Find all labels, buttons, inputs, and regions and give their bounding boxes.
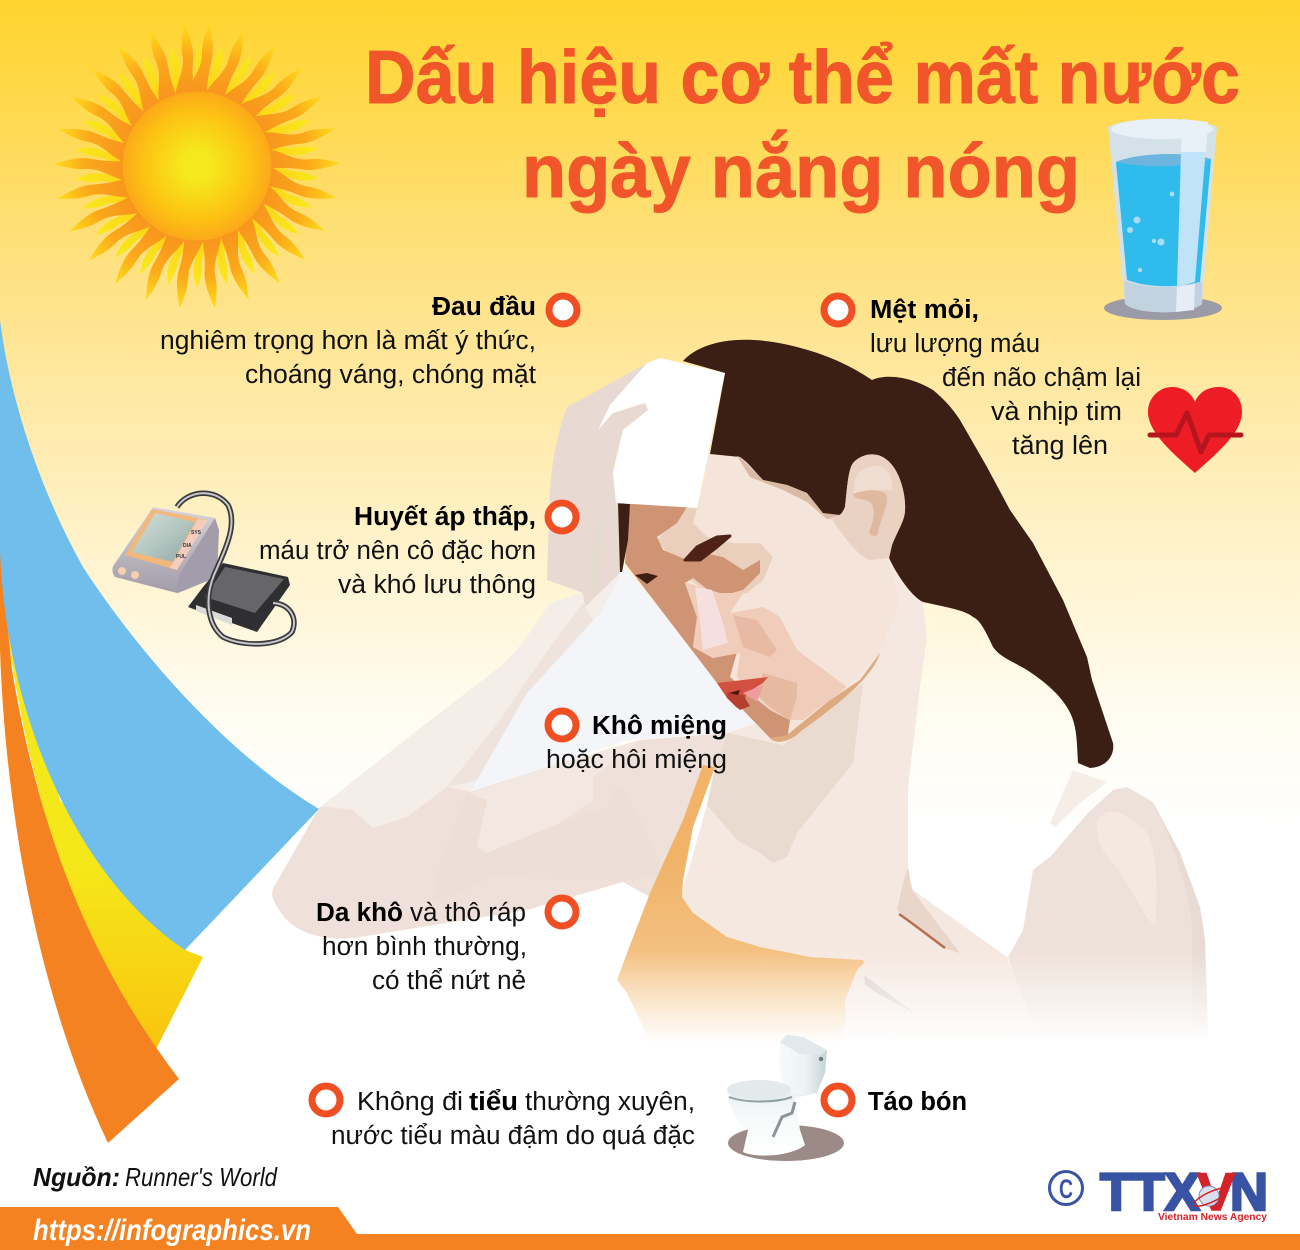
jaw line <box>770 653 880 742</box>
water <box>1116 154 1211 286</box>
title <box>365 35 1240 213</box>
title: ngày nắng nóng <box>522 129 1080 213</box>
text: Đau đầu: nghiêm trọng hơn là mất ý thức, <box>160 327 536 355</box>
armpit crease <box>897 867 960 953</box>
text: Không đi tiểu: tiểu <box>469 1088 518 1116</box>
text: Mệt mỏi <box>870 296 1141 460</box>
sun disc <box>122 92 272 240</box>
glass body <box>1108 119 1217 312</box>
white shirt <box>470 565 757 792</box>
glass base <box>1124 281 1202 312</box>
logo: TTXVN <box>1100 1163 1268 1223</box>
sun rays orange <box>53 22 341 309</box>
lower fade <box>600 950 1240 1044</box>
text: Mệt mỏi: Mệt mỏi, <box>870 296 979 324</box>
marker rings <box>312 296 852 1114</box>
right shoulder <box>1008 787 1208 1037</box>
decorative swooshes on left <box>0 320 319 1143</box>
swoosh: blue <box>0 320 319 950</box>
illustration: woman with headache <box>272 340 1240 1049</box>
swoosh: yellow <box>0 560 203 1061</box>
logo: copyright: C <box>1059 1174 1073 1204</box>
towel <box>598 358 725 508</box>
sun rays yellow <box>75 44 319 289</box>
monitor labels: SYS <box>191 530 202 536</box>
text: Khô miệng <box>546 712 727 774</box>
illustration: heart with pulse <box>1148 387 1242 473</box>
text: Da khô: Da khô <box>316 899 403 927</box>
source <box>33 1162 278 1192</box>
bowl crease <box>773 1102 795 1137</box>
logo: TTXVN: V <box>1197 1163 1235 1222</box>
bowl <box>728 1085 817 1156</box>
face <box>625 454 900 743</box>
illustration: toilet <box>727 1035 844 1161</box>
cheek <box>685 582 847 720</box>
source: Nguồn: <box>33 1162 120 1192</box>
cable <box>177 493 294 644</box>
text: Huyết áp thấp: và khó lưu thông <box>338 571 536 599</box>
pulse line <box>1150 413 1241 452</box>
footer url: https://infographics.vn <box>33 1214 311 1247</box>
hair strip by the towel <box>616 503 630 572</box>
chin tan <box>757 673 797 720</box>
left arm <box>272 575 727 939</box>
inner lip <box>743 685 763 702</box>
face base <box>625 454 900 743</box>
swoosh: orange <box>0 550 179 1143</box>
hair <box>683 340 1113 768</box>
title: Dấu hiệu cơ thể mất nước <box>365 35 1240 119</box>
glass highlight <box>1177 119 1208 287</box>
arm inner light <box>470 740 640 853</box>
hand <box>547 363 648 607</box>
heart <box>1148 387 1242 473</box>
neck shadow <box>707 683 863 863</box>
buttons <box>118 567 126 575</box>
monitor labels <box>176 530 202 560</box>
illustration: glass of water <box>1104 119 1222 320</box>
text: Đau đầu <box>160 293 536 389</box>
source: Runner's World <box>125 1162 278 1192</box>
hair shadow on forehead <box>737 456 842 519</box>
logo: TTXVN: N <box>1230 1163 1268 1222</box>
upper lip <box>717 677 768 708</box>
monitor body <box>112 507 218 593</box>
floor shadow <box>728 1125 844 1161</box>
text: Da khô <box>316 899 527 995</box>
text: Mệt mỏi: đến não chậm lại <box>942 364 1141 392</box>
bubbles <box>1127 192 1174 272</box>
logo globe <box>1199 1186 1219 1206</box>
monitor labels: PUL <box>176 554 186 560</box>
text: Huyết áp thấp: Huyết áp thấp, <box>354 503 536 531</box>
screen <box>132 513 195 562</box>
forearm light <box>319 575 620 828</box>
text: Không đi tiểu: thường xuyên, <box>525 1088 695 1116</box>
ear <box>830 454 905 560</box>
logo: copyright <box>1050 1172 1082 1204</box>
cheek tan <box>733 615 777 657</box>
tank <box>779 1035 827 1095</box>
footer bar <box>0 1207 1300 1250</box>
text: Mệt mỏi: tăng lên <box>1012 432 1108 460</box>
orange frame <box>125 509 208 570</box>
nose tan <box>657 507 773 598</box>
text: Không đi tiểu: Không đi <box>357 1088 463 1116</box>
bra <box>617 765 867 1042</box>
eye <box>635 573 658 584</box>
logo: TTXVN: Vietnam News Agency <box>1158 1211 1267 1223</box>
text: Huyết áp thấp: máu trở nên cô đặc hơn <box>259 537 536 565</box>
text: Khô miệng: hoặc hôi miệng <box>546 746 727 774</box>
cuff <box>188 563 290 632</box>
text: Đau đầu: Đau đầu <box>432 293 536 321</box>
text: Không đi tiểu: nước tiểu màu đậm do quá đặc <box>331 1122 695 1150</box>
monitor labels: DIA <box>183 543 192 549</box>
brown shade <box>625 503 790 740</box>
lower lip <box>727 692 750 710</box>
text: Khô miệng: Khô miệng <box>592 712 727 740</box>
text: Mệt mỏi: và nhịp tim <box>991 398 1122 426</box>
text: Táo bón: Táo bón <box>868 1088 967 1116</box>
hand on chest <box>845 960 917 1040</box>
eyebrow <box>685 536 730 560</box>
illustration: sun <box>53 22 341 309</box>
neck and chest skin <box>640 454 1040 1040</box>
text: Da khô: và thô ráp <box>410 899 526 927</box>
glass shadow <box>1104 296 1222 320</box>
text: Huyết áp thấp <box>259 503 536 599</box>
text: Không đi tiểu <box>331 1088 695 1150</box>
illustration: blood pressure monitor <box>112 493 294 644</box>
logo: TTXVN: TTX <box>1100 1163 1200 1222</box>
seat lid <box>727 1080 791 1100</box>
text: Da khô: hơn bình thường, <box>322 933 527 961</box>
text: Da khô: có thể nứt nẻ <box>372 967 526 995</box>
cheekbone highlight <box>695 587 728 650</box>
text: Đau đầu: choáng váng, chóng mặt <box>245 361 536 389</box>
text: Mệt mỏi: lưu lượng máu <box>870 330 1040 358</box>
